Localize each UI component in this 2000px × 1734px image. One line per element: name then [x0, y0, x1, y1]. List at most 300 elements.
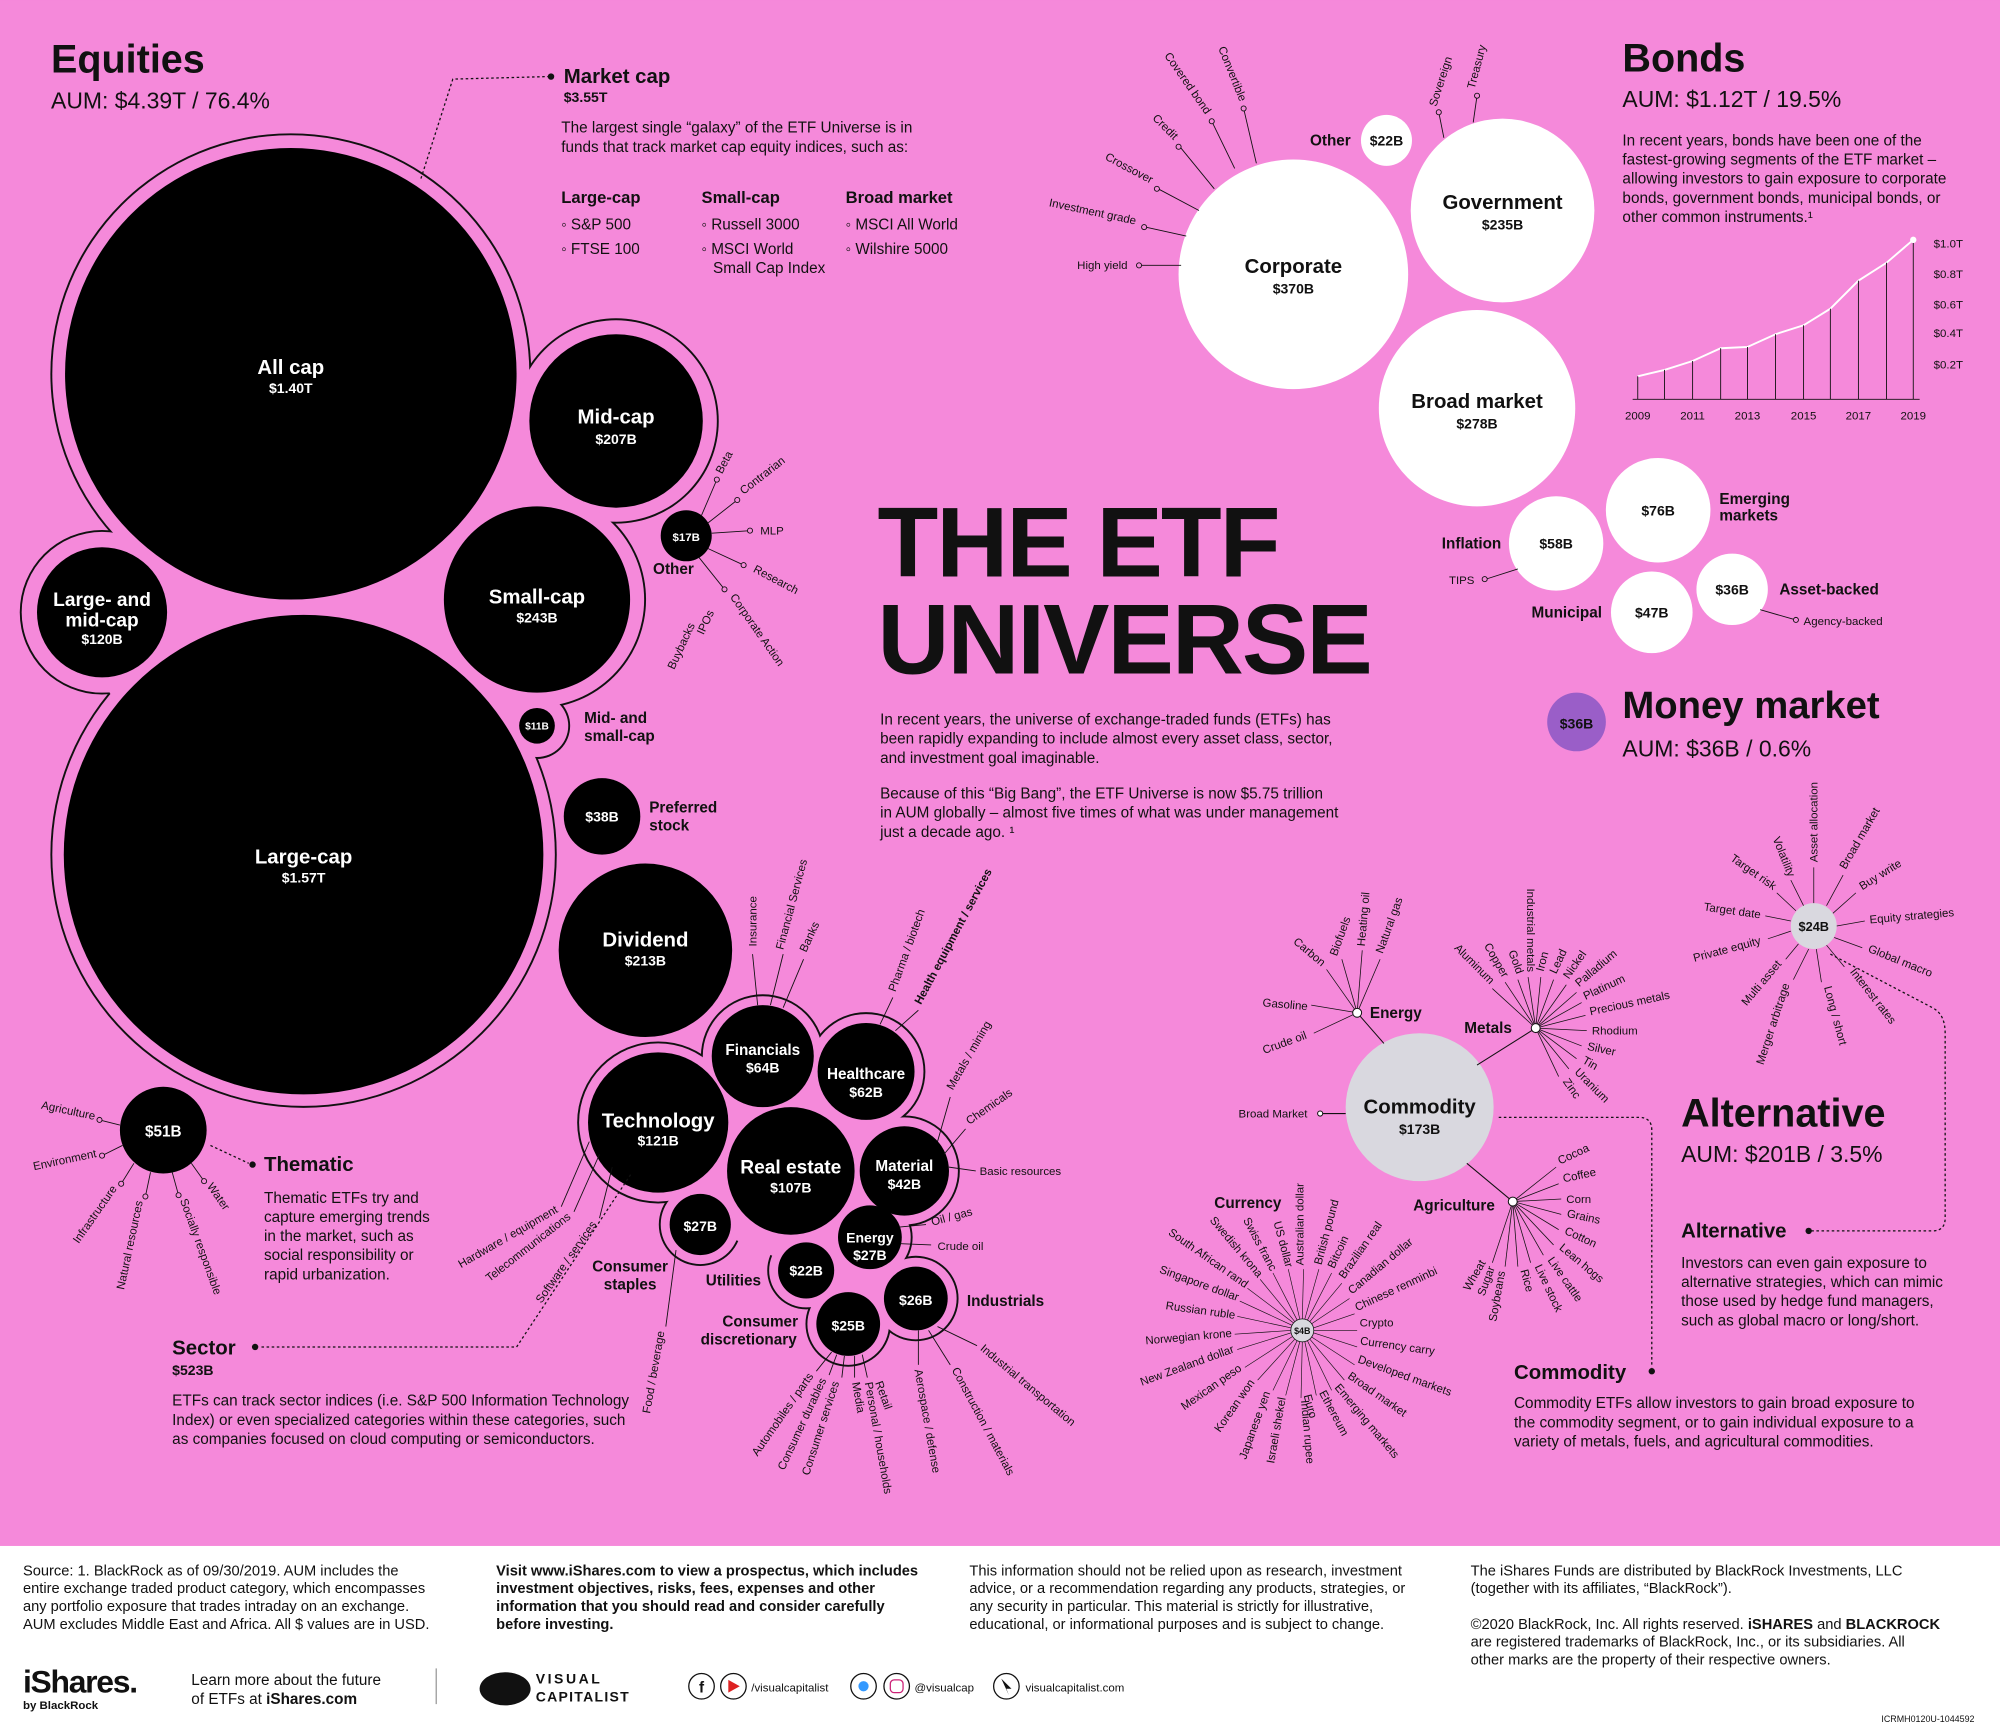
bubble: small-cap: Small-cap: [489, 586, 585, 608]
footer: educational, or informational purposes and is subject to change.: [969, 1617, 1384, 1633]
bubble: all cap: All cap: [257, 357, 324, 379]
market cap annotation: $3.55T: [564, 89, 608, 105]
alternative bubble: [1692, 782, 1955, 1066]
bubble: large-cap: $1.57T: [282, 870, 326, 886]
footer: /visualcapitalist: [751, 1682, 829, 1694]
alternative bubble: Volatility: [1770, 835, 1797, 879]
commodity bubble: Uranium: [1572, 1066, 1611, 1106]
thematic callout: [210, 1145, 430, 1283]
sector bubbles: Utilities: [706, 1273, 761, 1290]
sector spoke labels: Chemicals: [964, 1087, 1015, 1127]
currency cluster: Norwegian krone: [1145, 1328, 1232, 1347]
sector spoke labels: Media: [849, 1381, 866, 1415]
commodity bubble: Gasoline: [1262, 997, 1308, 1013]
bond bubbles: $22B: [1370, 132, 1403, 148]
sector bubbles: $27B: [683, 1218, 717, 1234]
sector spoke labels: Financial Services: [774, 858, 810, 951]
bubble: mid-cap: [529, 334, 703, 508]
sector spoke labels: Health equipment / services: [913, 867, 995, 1007]
alternative bubble: Target risk: [1728, 853, 1778, 893]
market cap annotation: Large-cap: [561, 188, 640, 207]
commodity bubble: Biofuels: [1328, 915, 1354, 958]
currency cluster: Ethereum: [1316, 1389, 1350, 1438]
bubble: all cap: [65, 148, 517, 600]
currency cluster: Swedish krona: [1207, 1215, 1265, 1280]
bond chart: $0.6T: [1934, 300, 1963, 312]
equities heading: [51, 38, 270, 113]
market cap annotation: Small-cap: [702, 188, 780, 207]
commodity bubble: Energy: [1370, 1005, 1422, 1022]
bubble: other equity: Contrarian: [738, 455, 788, 497]
currency cluster: New Zealand dollar: [1139, 1344, 1236, 1389]
bonds heading: [1622, 36, 1946, 226]
market cap annotation: [421, 66, 958, 277]
bond bubbles: $36B: [1715, 581, 1749, 597]
alternative heading: [1681, 1091, 1885, 1167]
commodity bubble: Broad Market: [1239, 1108, 1308, 1120]
commodity bubble: Tin: [1580, 1055, 1600, 1073]
currency cluster: Developed markets: [1356, 1354, 1453, 1399]
currency cluster: $4B: [1294, 1326, 1311, 1336]
alternative bubble: Private equity: [1692, 935, 1762, 965]
alternative callout: such as global macro or long/short.: [1681, 1312, 1919, 1329]
sector bubbles: $42B: [888, 1176, 921, 1192]
sector spoke labels: [456, 858, 1077, 1495]
commodity bubble: Iron: [1535, 951, 1551, 973]
sector callout: ETFs can track sector indices (i.e. S&P 500 Information Technology: [172, 1393, 629, 1410]
sector spoke labels: Construction / materials: [949, 1366, 1016, 1478]
bond chart: 2011: [1680, 411, 1705, 423]
alternative callout: alternative strategies, which can mimic: [1681, 1274, 1943, 1291]
bond bubbles: Covered bond: [1162, 51, 1213, 117]
sector spoke labels: Industrial transportation: [978, 1343, 1077, 1429]
commodity bubble: Aluminum: [1452, 942, 1496, 987]
bubble: mid and small-cap: $11B: [525, 722, 549, 733]
sector bubbles: $121B: [638, 1132, 679, 1148]
bond bubbles: $278B: [1456, 416, 1498, 432]
currency cluster: Canadian dollar: [1346, 1236, 1416, 1297]
commodity bubble: Precious metals: [1589, 990, 1671, 1018]
bubble: small-cap: [444, 506, 630, 693]
footer: Learn more about the future: [191, 1672, 381, 1689]
intro text: and investment goal imaginable.: [880, 750, 1100, 767]
sector spoke labels: Crude oil: [938, 1241, 983, 1253]
commodity bubble: Live cattle: [1545, 1255, 1584, 1304]
currency cluster: Brazilian real: [1337, 1220, 1385, 1281]
footer: investment objectives, risks, fees, expenses and other: [496, 1581, 875, 1597]
bubble: large and mid-cap: Large- and: [53, 590, 151, 611]
bubble: large and mid-cap: $120B: [81, 631, 123, 647]
main title: [878, 488, 1371, 696]
currency cluster: Chinese renminbi: [1353, 1265, 1439, 1314]
commodity bubble: Rice: [1518, 1268, 1535, 1293]
commodity bubble: Coffee: [1562, 1167, 1597, 1185]
commodity bubble: Lead: [1548, 948, 1570, 976]
sector bubbles: Healthcare: [827, 1066, 905, 1083]
money market: AUM: $36B / 0.6%: [1622, 735, 1811, 761]
bond bubbles: $76B: [1641, 502, 1675, 518]
commodity bubble: Metals: [1464, 1020, 1512, 1037]
alternative bubble: Interest rates: [1847, 966, 1898, 1027]
thematic callout: in the market, such as: [264, 1228, 414, 1245]
bubble: other equity: [653, 449, 800, 671]
alternative heading: AUM: $201B / 3.5%: [1681, 1141, 1883, 1167]
intro text: Because of this “Big Bang”, the ETF Universe is now $5.75 trillion: [880, 786, 1323, 803]
bond chart: 2015: [1791, 411, 1816, 423]
sector outline: [577, 994, 960, 1367]
bubble: mid and small-cap: [519, 708, 655, 745]
bubble: dividend: Dividend: [602, 929, 688, 951]
alternative callout: Investors can even gain exposure to: [1681, 1255, 1927, 1272]
sector spoke labels: Banks: [798, 920, 822, 954]
footer: visualcapitalist.com: [1026, 1682, 1124, 1694]
bond bubbles: Crossover: [1103, 151, 1155, 186]
sector bubbles: $22B: [789, 1263, 823, 1279]
commodity callout: Commodity ETFs allow investors to gain broad exposure to: [1514, 1395, 1914, 1412]
currency cluster: Broad market: [1345, 1370, 1409, 1420]
bond chart: [1625, 237, 1963, 423]
bubble: large and mid-cap: mid-cap: [65, 610, 139, 631]
currency cluster: Euro: [1301, 1393, 1319, 1420]
currency cluster: Bitcoin: [1326, 1234, 1351, 1270]
bubble: preferred stock: [564, 778, 717, 855]
footer: (together with its affiliates, “BlackRock”).: [1471, 1581, 1732, 1597]
footer: are registered trademarks of BlackRock, Inc., or its subsidiaries. All: [1471, 1635, 1905, 1651]
commodity bubble: Commodity: [1364, 1097, 1476, 1119]
alternative bubble: $24B: [1799, 919, 1829, 934]
bond bubbles: $58B: [1539, 536, 1573, 552]
sector bubbles: Material: [875, 1158, 933, 1175]
bubble: mid-cap: $207B: [595, 431, 637, 447]
currency cluster: Indian rupee: [1298, 1400, 1316, 1464]
bond bubbles: TIPS: [1449, 575, 1475, 587]
sector bubbles: $27B: [853, 1247, 887, 1263]
commodity bubble: Palladium: [1573, 948, 1620, 990]
commodity bubble: Rhodium: [1592, 1025, 1638, 1037]
commodity bubble: Nickel: [1562, 949, 1589, 981]
market cap annotation: funds that track market cap equity indices, such as:: [561, 139, 908, 156]
sector callout: [172, 1174, 631, 1448]
bubble: other equity: Beta: [714, 449, 736, 476]
bubble: large-cap: [64, 615, 543, 1094]
market cap annotation: Small Cap Index: [713, 260, 826, 277]
alternative heading: Alternative: [1681, 1091, 1885, 1135]
footer: AUM excludes Middle East and Africa. All $ values are in USD.: [23, 1617, 429, 1633]
main title: UNIVERSE: [878, 585, 1371, 696]
footer: ©2020 BlackRock, Inc. All rights reserved. iSHARES and BLACKROCK: [1471, 1617, 1940, 1633]
bond bubbles: Agency-backed: [1804, 616, 1883, 628]
alternative callout: Alternative: [1681, 1220, 1787, 1242]
bubble: other equity: Buybacks: [666, 621, 698, 671]
commodity bubble: Wheat: [1462, 1258, 1489, 1293]
currency cluster: Australian dollar: [1295, 1183, 1307, 1265]
sector bubbles: Consumer: [592, 1259, 668, 1276]
currency cluster: Korean won: [1213, 1378, 1258, 1435]
footer: iShares.: [23, 1664, 137, 1700]
sector spoke labels: Basic resources: [980, 1166, 1061, 1178]
footer: This information should not be relied upon as research, investment: [969, 1563, 1402, 1579]
sector bubbles: $62B: [849, 1084, 883, 1100]
bond bubbles: $235B: [1482, 217, 1523, 233]
commodity callout: the commodity segment, or to gain individual exposure to a: [1514, 1414, 1914, 1431]
sector spoke labels: Telecommunications: [484, 1211, 573, 1284]
thematic bubble: Agriculture: [40, 1100, 96, 1123]
commodity bubble: Silver: [1586, 1041, 1617, 1059]
bubble: other equity: Corporate Action: [727, 592, 786, 669]
money market: [1547, 684, 1880, 761]
bond bubbles: Government: [1442, 192, 1563, 214]
sector spoke labels: Automobiles / parts: [750, 1371, 816, 1458]
market cap annotation: ◦ Russell 3000: [702, 217, 800, 234]
bonds heading: allowing investors to gain exposure to corporate: [1622, 171, 1946, 188]
sector spoke labels: Aerospace / defense: [912, 1368, 942, 1474]
sector bubbles: $26B: [899, 1292, 933, 1308]
commodity bubble: Cotton: [1563, 1225, 1598, 1250]
money market: $36B: [1560, 715, 1593, 731]
currency cluster: US dollar: [1271, 1220, 1294, 1269]
commodity callout: Commodity: [1514, 1362, 1627, 1384]
bubble: other equity: MLP: [760, 525, 784, 537]
sector bubbles: staples: [604, 1277, 656, 1294]
bond bubbles: [1048, 43, 1883, 653]
bubble: dividend: [559, 864, 732, 1037]
main title: THE ETF: [878, 488, 1279, 599]
thematic callout: capture emerging trends: [264, 1209, 430, 1226]
bonds heading: In recent years, bonds have been one of the: [1622, 132, 1922, 149]
bubble: mid and small-cap: small-cap: [584, 728, 655, 745]
commodity bubble: Industrial metals: [1524, 888, 1536, 972]
thematic callout: Thematic: [264, 1154, 354, 1176]
bond bubbles: $370B: [1273, 280, 1314, 296]
bubble: preferred stock: stock: [649, 817, 690, 834]
commodity bubble: Copper: [1481, 941, 1510, 980]
bubble: large-cap: Large-cap: [255, 847, 352, 869]
sector bubbles: Financials: [725, 1042, 800, 1059]
currency cluster: Japanese yen: [1238, 1390, 1273, 1461]
bond bubbles: Sovereign: [1428, 55, 1455, 108]
sector bubbles: Energy: [846, 1229, 894, 1245]
sector spoke labels: Insurance: [747, 896, 759, 946]
commodity bubble: [1239, 888, 1671, 1322]
commodity bubble: Zinc: [1560, 1077, 1582, 1101]
equities galaxy outline: [20, 133, 719, 1108]
alternative bubble: Multi asset: [1740, 958, 1785, 1008]
bond chart: 2009: [1625, 411, 1651, 423]
intro text: just a decade ago. ¹: [879, 824, 1014, 841]
intro text: in AUM globally – almost five times of what was under management: [880, 805, 1339, 822]
sector spoke labels: Personal / households: [862, 1381, 893, 1495]
sector callout: Index) or even specialized categories within these categories, such: [172, 1412, 625, 1429]
equities heading: AUM: $4.39T / 76.4%: [51, 87, 270, 113]
sector bubbles: Technology: [602, 1111, 715, 1133]
bond bubbles: Treasury: [1466, 43, 1489, 90]
bond bubbles: Inflation: [1442, 536, 1501, 553]
intro text: In recent years, the universe of exchange-traded funds (ETFs) has: [880, 712, 1331, 729]
bonds heading: other common instruments.¹: [1622, 209, 1813, 226]
equities heading: Equities: [51, 38, 205, 82]
sector spoke labels: Consumer durables: [776, 1376, 829, 1472]
commodity bubble: $173B: [1399, 1121, 1440, 1137]
footer: any security in particular. This material is strictly for illustrative,: [969, 1599, 1373, 1615]
currency cluster: Crypto: [1360, 1318, 1393, 1330]
sector bubbles: Industrials: [967, 1293, 1044, 1310]
footer: entire exchange traded product category, which encompasses: [23, 1581, 425, 1597]
bond chart: $0.2T: [1934, 360, 1963, 372]
thematic callout: Thematic ETFs try and: [264, 1190, 419, 1207]
sector bubbles: $107B: [770, 1180, 811, 1196]
bond bubbles: $47B: [1635, 604, 1669, 620]
bond bubbles: Convertible: [1215, 45, 1248, 103]
bonds heading: fastest-growing segments of the ETF market –: [1622, 152, 1937, 169]
footer: of ETFs at iShares.com: [191, 1691, 357, 1708]
footer: Visit www.iShares.com to view a prospectus, which includes: [496, 1563, 918, 1579]
sector bubbles: Consumer: [722, 1314, 798, 1331]
currency cluster: Currency carry: [1359, 1336, 1436, 1358]
bubble: other equity: $17B: [673, 532, 700, 544]
currency cluster: Mexican peso: [1179, 1363, 1244, 1413]
bond chart: $0.4T: [1934, 328, 1963, 340]
commodity bubble: Gold: [1505, 949, 1525, 976]
commodity bubble: Carbon: [1291, 936, 1327, 969]
commodity bubble: Live stock: [1532, 1263, 1564, 1314]
sector callout: as companies focused on cloud computing or semiconductors.: [172, 1431, 595, 1448]
alternative bubble: Long / short: [1821, 985, 1849, 1047]
bubble: mid-cap: Mid-cap: [578, 407, 655, 429]
currency cluster: [1139, 1183, 1453, 1464]
footer: other marks are the property of their respective owners.: [1471, 1653, 1831, 1669]
footer: @visualcap: [915, 1682, 974, 1694]
currency cluster: South African rand: [1166, 1227, 1250, 1291]
sector bubbles: $64B: [746, 1060, 780, 1076]
bubble: preferred stock: Preferred: [649, 800, 717, 817]
market cap annotation: ◦ MSCI All World: [846, 217, 958, 234]
thematic bubble: Natural resources: [115, 1199, 146, 1291]
bond bubbles: Asset-backed: [1779, 581, 1879, 598]
sector bubbles: Real estate: [740, 1158, 841, 1179]
alternative bubble: Target date: [1703, 902, 1761, 921]
currency cluster: Singapore dollar: [1158, 1264, 1240, 1304]
bubble: large and mid-cap: [37, 547, 167, 677]
bond bubbles: Corporate: [1245, 256, 1342, 278]
market cap annotation: Broad market: [846, 188, 953, 207]
commodity bubble: Soybeans: [1487, 1270, 1508, 1322]
bubble: all cap: $1.40T: [269, 380, 313, 396]
sector spoke labels: Software / services: [534, 1219, 600, 1306]
thematic bubble: Infrastructure: [71, 1184, 120, 1246]
alternative callout: [1681, 954, 1945, 1329]
money market: Money market: [1622, 684, 1880, 727]
bond bubbles: Credit: [1150, 112, 1180, 143]
footer: before investing.: [496, 1617, 613, 1633]
intro text: [879, 712, 1339, 841]
footer: ICRMH0120U-1044592: [1881, 1714, 1975, 1724]
sector callout: $523B: [172, 1362, 214, 1378]
currency cluster: Russian ruble: [1165, 1300, 1236, 1322]
currency cluster: Emerging markets: [1332, 1382, 1401, 1461]
commodity bubble: Lean hogs: [1557, 1242, 1606, 1286]
footer: The iShares Funds are distributed by BlackRock Investments, LLC: [1471, 1563, 1903, 1579]
alternative bubble: Merger arbitrage: [1755, 982, 1792, 1066]
alternative callout: those used by hedge fund managers,: [1681, 1293, 1934, 1310]
commodity bubble: Agriculture: [1413, 1197, 1495, 1214]
market cap annotation: The largest single “galaxy” of the ETF Universe is in: [561, 120, 912, 137]
thematic bubble: Water: [204, 1181, 231, 1213]
market cap annotation: Market cap: [564, 66, 670, 88]
commodity bubble: Cocoa: [1556, 1142, 1592, 1167]
intro text: been rapidly expanding to include almost every asset class, sector,: [880, 731, 1332, 748]
thematic callout: rapid urbanization.: [264, 1266, 390, 1283]
bond bubbles: Other: [1310, 132, 1351, 149]
bubble: dividend: $213B: [625, 953, 666, 969]
bonds heading: bonds, government bonds, municipal bonds, or: [1622, 190, 1940, 207]
bond chart: 2017: [1846, 411, 1871, 423]
footer: CAPITALIST: [536, 1689, 630, 1705]
thematic bubble: Environment: [32, 1148, 98, 1173]
bond bubbles: High yield: [1077, 260, 1128, 272]
bubble: small-cap: $243B: [516, 609, 558, 625]
sector callout: Sector: [172, 1338, 236, 1360]
sector spoke labels: Consumer services: [800, 1380, 842, 1477]
market cap annotation: ◦ FTSE 100: [561, 241, 640, 258]
sector spoke labels: Oil / gas: [930, 1206, 974, 1229]
sector bubbles: $25B: [831, 1317, 865, 1333]
bonds heading: Bonds: [1622, 36, 1745, 80]
alternative bubble: Broad market: [1838, 805, 1883, 871]
commodity bubble: Heating oil: [1356, 892, 1373, 947]
bond chart: 2019: [1901, 411, 1926, 423]
footer: any portfolio exposure that trades intraday on an exchange.: [23, 1599, 409, 1615]
sector spoke labels: Retail: [872, 1380, 893, 1411]
bond bubbles: markets: [1719, 507, 1778, 524]
currency cluster: Israeli shekel: [1265, 1396, 1289, 1464]
sector bubbles: discretionary: [701, 1331, 797, 1348]
thematic bubble: $51B: [145, 1124, 182, 1141]
commodity bubble: Platinum: [1582, 973, 1627, 1003]
thematic callout: social responsibility or: [264, 1247, 414, 1264]
alternative bubble: Equity strategies: [1869, 907, 1955, 926]
currency cluster: Currency: [1214, 1195, 1282, 1212]
commodity bubble: Grains: [1566, 1208, 1601, 1227]
bubble: preferred stock: $38B: [585, 808, 619, 824]
sector bubbles: [588, 1005, 1044, 1356]
commodity bubble: Corn: [1566, 1194, 1591, 1206]
currency cluster: Swiss franc: [1240, 1216, 1278, 1273]
market cap annotation: ◦ S&P 500: [561, 217, 631, 234]
bonds heading: AUM: $1.12T / 19.5%: [1622, 86, 1841, 112]
commodity callout: [1499, 1117, 1914, 1450]
market cap annotation: ◦ Wilshire 5000: [846, 241, 948, 258]
bubble: other equity: Other: [653, 561, 694, 578]
bond bubbles: Emerging: [1719, 491, 1790, 508]
alternative bubble: Global macro: [1866, 943, 1934, 980]
footer: information that you should read and consider carefully: [496, 1599, 885, 1615]
commodity bubble: Crude oil: [1261, 1030, 1308, 1057]
sector spoke labels: Food / beverage: [641, 1330, 667, 1414]
alternative bubble: Asset allocation: [1809, 782, 1821, 862]
footer: by BlackRock: [23, 1700, 99, 1712]
thematic bubble: Socially responsible: [177, 1197, 223, 1297]
bond bubbles: Municipal: [1531, 604, 1602, 621]
market cap annotation: ◦ MSCI World: [702, 241, 793, 258]
bubble: mid and small-cap: Mid- and: [584, 710, 647, 727]
bond chart: $0.8T: [1934, 269, 1963, 281]
bubble: other equity: Research: [751, 564, 800, 597]
sector spoke labels: Pharma / biotech: [887, 908, 928, 993]
footer: VISUAL: [536, 1671, 602, 1687]
commodity bubble: Sugar: [1476, 1265, 1498, 1298]
footer: advice, or a recommendation regarding any products, strategies, or: [969, 1581, 1405, 1597]
footer: Source: 1. BlackRock as of 09/30/2019. AUM includes the: [23, 1563, 399, 1579]
